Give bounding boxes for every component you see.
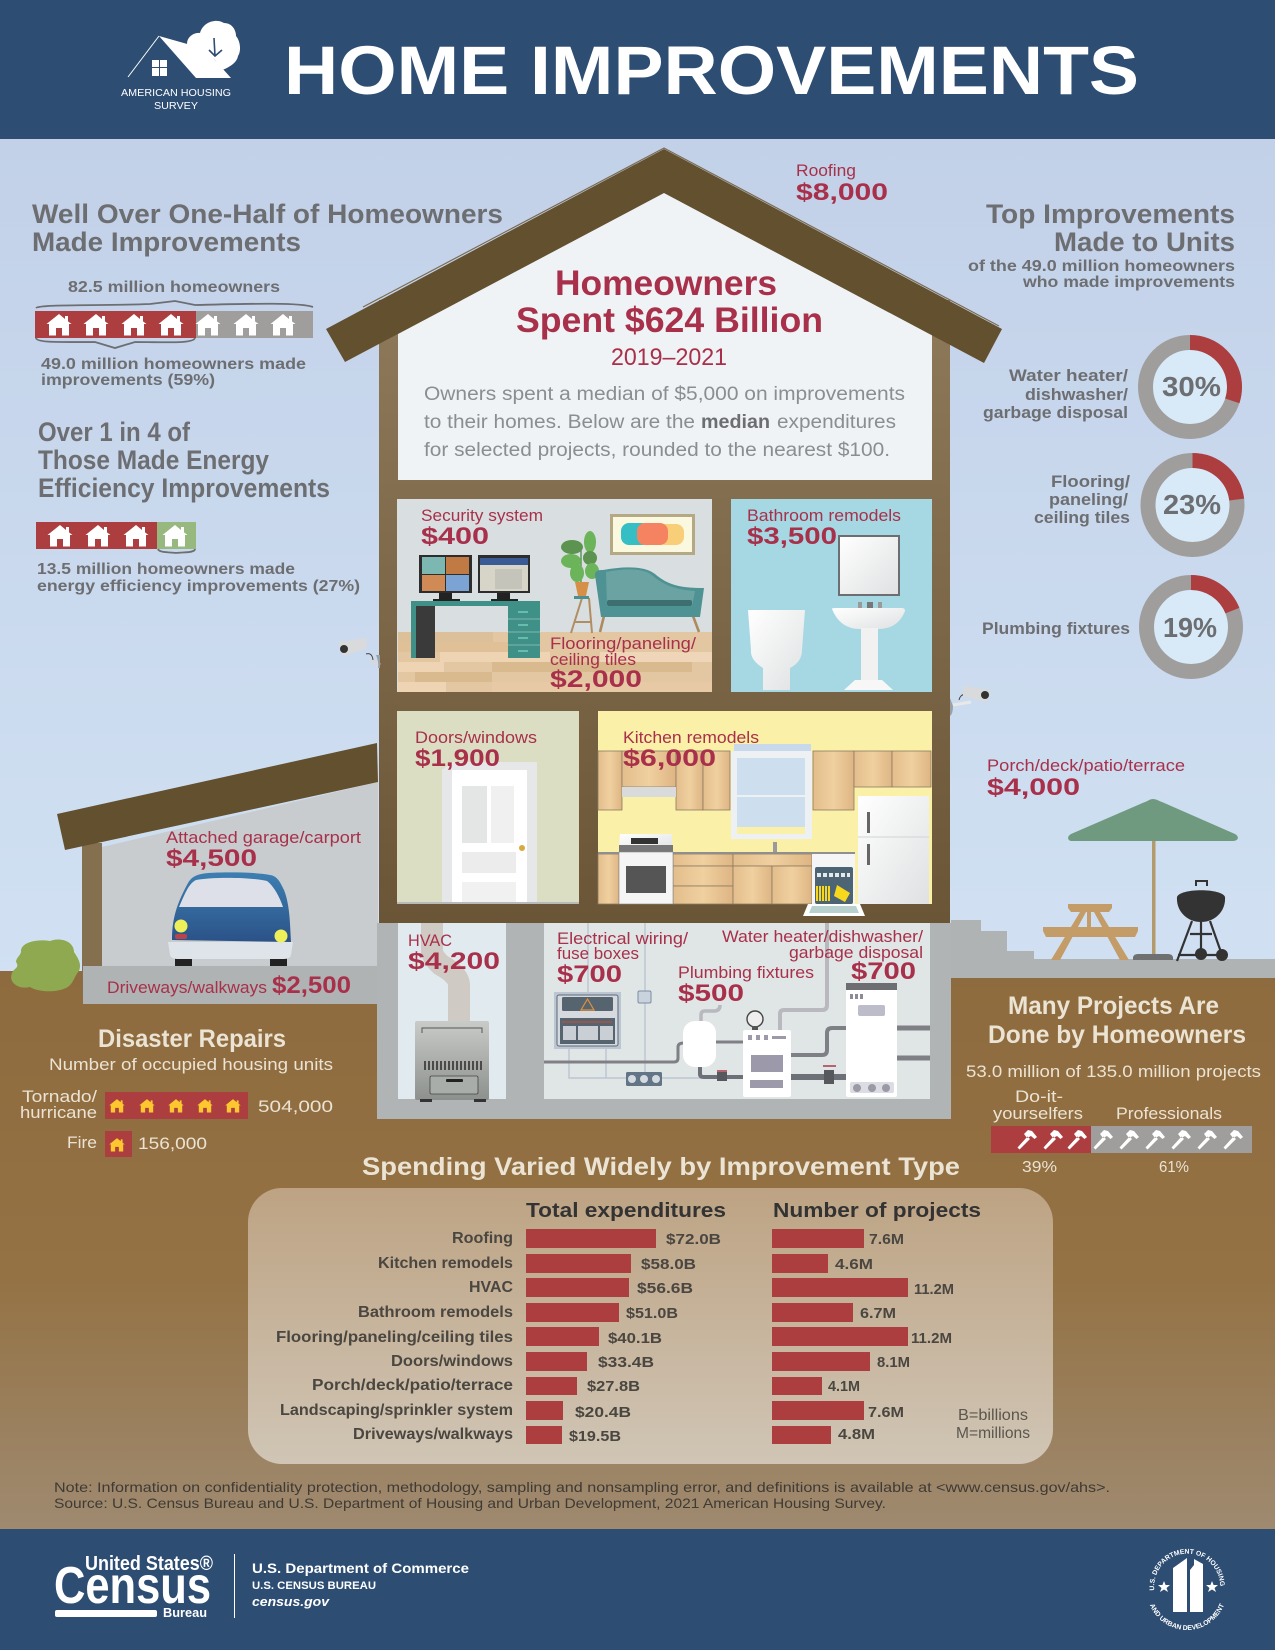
label: flooring: paneling/: [1049, 491, 1128, 509]
picture on wall: [610, 514, 695, 555]
label: HVAC: [408, 931, 500, 975]
label: doors/windows: $1,900: [415, 745, 500, 772]
label: water heater: Water heater/dishwasher/: [722, 927, 923, 946]
icon: car: [168, 872, 293, 966]
label: security system: $400: [421, 523, 489, 550]
attic body text: to their homes. Below are the: [424, 412, 695, 433]
label: flooring: $2,000: [550, 666, 642, 693]
base cabinets: [598, 854, 812, 904]
icon: furnace: [415, 923, 489, 1102]
panel: disaster repairs: [20, 1025, 333, 1157]
bar chart: total expenditures: $20.4B: [575, 1404, 631, 1421]
label: electrical wiring: $700: [557, 961, 622, 988]
label: 13.5 million homeowners: 13.5 million homeowners made: [37, 561, 295, 578]
source note: Note: Information on confidentiality protection, methodology, sampling and nonsampling error, and definitions is available at <www.census.gov/ahs>.: [54, 1479, 1110, 1495]
icon bar: 82.5 million homeowners: [35, 301, 313, 348]
label: kitchen remodels: [623, 728, 759, 772]
label: water heater: Water heater/: [1009, 367, 1128, 385]
bar chart: number of projects: [772, 1229, 954, 1444]
label: bathroom remodels: Bathroom remodels: [747, 506, 901, 525]
labels: do-it-yourselfers and professionals: Do-it-: [1015, 1087, 1063, 1106]
attic headline: 2019–2021: [611, 344, 727, 371]
category labels: [276, 1230, 513, 1443]
basement walls: [377, 923, 951, 1119]
icon: mirror: [839, 536, 899, 595]
bar chart: number of projects: 11.2M: [914, 1281, 954, 1298]
category labels: Porch/deck/patio/terrace: [312, 1377, 513, 1394]
label: 49.0 million homeowners made improvements: 49.0 million homeowners made: [41, 356, 306, 373]
bar chart: total expenditures: $27.8B: [587, 1378, 640, 1395]
label: 49.0 million homeowners made improvements: improvements (59%): [41, 372, 215, 389]
column headings: Number of projects: [773, 1200, 981, 1222]
heading: disaster repairs: Disaster Repairs: [98, 1025, 286, 1053]
label: porch: Porch/deck/patio/terrace: [987, 756, 1185, 775]
American Housing Survey logo: [121, 21, 240, 112]
icon: toilet: [748, 610, 805, 690]
label: attached garage: $4,500: [166, 845, 257, 872]
labels: do-it-yourselfers and professionals: yourselfers: [993, 1104, 1083, 1123]
main house: [326, 148, 1002, 1119]
row: tornado/hurricane: hurricane: [20, 1103, 97, 1122]
attic body text: for selected projects, rounded to the nearest $100.: [424, 440, 890, 461]
label: driveways: [107, 972, 351, 999]
label: doors/windows: [415, 728, 537, 772]
category labels: HVAC: [469, 1279, 513, 1296]
bar chart: number of projects: 8.1M: [877, 1354, 910, 1371]
icon: sink: [832, 602, 905, 690]
label: plumbing fixtures: Plumbing fixtures: [982, 620, 1130, 638]
bar chart: number of projects: 11.2M: [911, 1330, 952, 1347]
bar chart: total expenditures: $19.5B: [569, 1428, 621, 1445]
ground background: [0, 971, 1275, 1529]
row: tornado/hurricane: 504,000: [258, 1097, 333, 1116]
label: water heater: $700: [851, 958, 916, 985]
label: security system: [421, 506, 543, 550]
Census Bureau logo: Census: [54, 1557, 211, 1615]
label: doors/windows: Doors/windows: [415, 728, 537, 747]
label: bathroom remodels: [747, 506, 901, 550]
category labels: Driveways/walkways: [353, 1426, 513, 1443]
icon: expansion tank: [683, 1021, 716, 1067]
donut: 19 percent: [1146, 582, 1236, 672]
bar chart: number of projects: 7.6M: [868, 1404, 904, 1421]
label: electrical wiring: [557, 929, 688, 988]
icon: fuse box: [554, 992, 621, 1049]
heading: top improvements: of the 49.0 million homeowners: [968, 258, 1235, 275]
attic body text: Owners spent a median of $5,000 on improvements: [424, 384, 905, 405]
label: water heater: dishwasher/: [1025, 386, 1128, 404]
label: flooring: Flooring/paneling/: [550, 634, 696, 653]
header band: [0, 0, 1275, 139]
bar chart: total expenditures: $72.0B: [666, 1231, 721, 1248]
label: roofing: Roofing: [796, 161, 856, 180]
icon: picnic table: [1043, 904, 1138, 960]
label: porch: $4,000: [987, 774, 1080, 801]
label: roofing: [796, 161, 888, 206]
sky background: [0, 139, 1275, 981]
label: HVAC: $4,200: [408, 948, 500, 975]
heading: top improvements: Made to Units: [1054, 227, 1235, 257]
source note: [54, 1479, 1110, 1511]
Census Bureau logo: United States®: [85, 1553, 213, 1575]
label: 13.5 million homeowners: [37, 561, 360, 595]
column headings: [526, 1200, 981, 1222]
panel: top improvements: [968, 199, 1237, 672]
range hood: [622, 787, 676, 797]
bar chart: total expenditures: $56.6B: [637, 1280, 693, 1297]
icon: grill: [1177, 881, 1228, 961]
icon: computer desk: [411, 555, 540, 658]
icon: fridge: [858, 796, 929, 904]
heading: top improvements: who made improvements: [1022, 274, 1235, 291]
source note: Source: U.S. Census Bureau and U.S. Department of Housing and Urban Development, 2021 American Housing Survey.: [54, 1495, 886, 1511]
label: water heater: garbage disposal: [983, 404, 1128, 422]
labels: do-it-yourselfers and professionals: [993, 1087, 1222, 1123]
attic headline: Spent $624 Billion: [516, 301, 823, 340]
bar chart: total expenditures: $51.0B: [626, 1305, 678, 1322]
subheading: occupied housing units: Number of occupied housing units: [49, 1055, 333, 1074]
labels: percentages: 39%: [1022, 1159, 1057, 1176]
label: plumbing fixtures: [678, 963, 814, 1007]
bar chart: total expenditures: $58.0B: [641, 1256, 696, 1273]
label: electrical wiring: Electrical wiring/: [557, 929, 688, 948]
label: driveways: $2,500: [272, 972, 351, 999]
bar chart: total expenditures: $40.1B: [608, 1330, 662, 1347]
heading: well over one-half: Made Improvements: [32, 227, 301, 257]
label: flooring: ceiling tiles: [1034, 509, 1130, 527]
American Housing Survey logo: SURVEY: [154, 100, 198, 112]
category labels: Flooring/paneling/ceiling tiles: [276, 1329, 513, 1346]
bar chart: number of projects: 7.6M: [869, 1231, 904, 1248]
label: roofing: $8,000: [796, 179, 888, 206]
icon: kitchen window: [731, 744, 812, 839]
label: security system: Security system: [421, 506, 543, 525]
label: bathroom remodels: $3,500: [747, 523, 837, 550]
heading: top improvements: Top Improvements: [986, 199, 1235, 229]
label: plumbing fixtures: $500: [678, 980, 744, 1007]
label: attached garage: [166, 828, 361, 872]
category labels: Bathroom remodels: [358, 1304, 513, 1321]
panel: energy efficiency improvements: [36, 417, 360, 595]
HUD seal: [1149, 1548, 1225, 1630]
icon bar: energy improvements: [36, 522, 196, 553]
label: 49.0 million homeowners made improvements: [41, 356, 306, 389]
label: porch: [987, 756, 1185, 801]
agency text: census.gov: [252, 1594, 330, 1609]
icon: right security camera: [950, 686, 990, 716]
bar chart: total expenditures: $33.4B: [598, 1354, 654, 1371]
panel: projects done by homeowners: [966, 992, 1261, 1176]
icon: valves: [717, 1066, 836, 1084]
house walls: [379, 300, 950, 923]
heading: spending varied: Spending Varied Widely by Improvement Type: [362, 1153, 960, 1181]
heading: over 1 in 4: Those Made Energy: [38, 445, 269, 475]
bar chart: number of projects: 6.7M: [860, 1305, 896, 1322]
icon: left security camera: [339, 638, 380, 668]
bar chart: number of projects: 4.6M: [835, 1256, 873, 1273]
wood floor: [398, 632, 712, 692]
room: utilities: [544, 923, 930, 1099]
attic headline: [516, 264, 823, 371]
heading: top improvements: [968, 199, 1235, 291]
icon: sofa: [595, 567, 704, 632]
donut: 30 percent: [1146, 342, 1234, 432]
row: fire: Fire: [67, 1133, 97, 1152]
bar chart: total expenditures: [526, 1229, 721, 1445]
heading: well over one-half: Well Over One-Half of Homeowners: [32, 199, 503, 229]
bar chart: number of projects: 4.1M: [828, 1378, 860, 1395]
row: tornado/hurricane: Tornado/: [22, 1087, 97, 1106]
label: water heater: [983, 367, 1128, 422]
heading: many projects: [988, 992, 1246, 1049]
garage: [11, 743, 378, 1004]
label: HVAC: HVAC: [408, 931, 452, 950]
label: flooring: ceiling tiles: [550, 650, 636, 669]
column headings: Total expenditures: [526, 1200, 726, 1222]
labels: percentages: [1022, 1159, 1189, 1176]
label: kitchen remodels: Kitchen remodels: [623, 728, 759, 747]
attic headline: Homeowners: [555, 264, 777, 303]
room: security and flooring: [397, 499, 712, 693]
heading: many projects: Done by Homeowners: [988, 1021, 1246, 1049]
patio with steps, umbrella, picnic table and grill: [951, 799, 1275, 978]
row: fire: 156,000: [138, 1134, 207, 1153]
legend: units: B=billions: [958, 1407, 1028, 1424]
heading: over 1 in 4: Efficiency Improvements: [38, 473, 330, 503]
heading: many projects: Many Projects Are: [1008, 992, 1219, 1020]
icon: stove: [619, 834, 673, 904]
category labels: Roofing: [452, 1230, 513, 1247]
label: attached garage: Attached garage/carport: [166, 828, 361, 847]
icon bar: hammers: [991, 1126, 1252, 1153]
HUD seal: AND URBAN DEVELOPMENT: [1150, 1603, 1224, 1630]
donut: 23 percent: [1148, 460, 1237, 550]
icon: dishwasher: [803, 854, 865, 916]
pipes: [544, 923, 930, 1077]
icon: faucet: [773, 842, 777, 852]
attic body text: median: [701, 412, 770, 433]
label: flooring: [550, 634, 696, 693]
category labels: Doors/windows: [391, 1353, 513, 1370]
room: kitchen: [598, 711, 932, 916]
icon: outlets: [626, 1072, 662, 1086]
donut: 30 percent: 30%: [1162, 371, 1221, 402]
wiring lines: [569, 923, 702, 1078]
donut: 23 percent: 23%: [1163, 489, 1221, 520]
icon: boiler: [743, 1011, 791, 1097]
icon: plant and stool: [561, 531, 599, 633]
category labels: Kitchen remodels: [378, 1255, 513, 1272]
label: 82.5 million homeowners: 82.5 million homeowners: [68, 279, 280, 296]
label: flooring: [1034, 473, 1130, 527]
label: electrical wiring: fuse boxes: [557, 944, 639, 963]
HUD seal: U.S. DEPARTMENT OF HOUSING: [1149, 1548, 1225, 1590]
Census Bureau logo: Bureau: [163, 1605, 207, 1620]
icon: bush: [11, 939, 80, 991]
heading: well over one-half: [32, 199, 503, 257]
legend: units: [956, 1407, 1030, 1442]
row: tornado/hurricane: [20, 1087, 333, 1122]
donut: 19 percent: 19%: [1163, 612, 1217, 643]
icon: light switch: [638, 991, 651, 1003]
agency text: U.S. CENSUS BUREAU: [252, 1580, 376, 1592]
driveway slab: [83, 966, 377, 1004]
agency text: [252, 1560, 469, 1609]
label: kitchen remodels: $6,000: [623, 745, 716, 772]
label: water heater: [722, 927, 923, 985]
title: HOME IMPROVEMENTS: [284, 32, 1139, 109]
labels: percentages: 61%: [1159, 1159, 1189, 1176]
heading: over 1 in 4: [38, 417, 330, 503]
heading: over 1 in 4: Over 1 in 4 of: [38, 417, 190, 447]
icon: water heater: [846, 983, 897, 1097]
room: HVAC: [398, 923, 506, 1102]
icon: door: [442, 762, 537, 902]
label: flooring: Flooring/: [1051, 473, 1130, 491]
room: bathroom: [731, 499, 932, 692]
attic body text: [424, 384, 905, 461]
row: fire: [67, 1131, 207, 1157]
panel: spending table: [248, 1188, 1053, 1464]
room: doors and windows: [397, 711, 579, 904]
label: plumbing fixtures: Plumbing fixtures: [678, 963, 814, 982]
panel: homeowners who made improvements: [32, 199, 503, 389]
attic body text: expenditures: [777, 412, 896, 433]
label: water heater: garbage disposal: [789, 943, 923, 962]
attic panel: [398, 193, 932, 480]
labels: do-it-yourselfers and professionals: Professionals: [1116, 1104, 1222, 1123]
icon: umbrella: [1068, 799, 1238, 960]
category labels: Landscaping/sprinkler system: [280, 1402, 513, 1419]
icon: roof: [326, 148, 1002, 363]
agency text: U.S. Department of Commerce: [252, 1560, 469, 1576]
label: 13.5 million homeowners: energy efficiency improvements (27%): [37, 578, 360, 595]
label: driveways: Driveways/walkways: [107, 978, 267, 997]
footer band: [54, 1548, 1225, 1630]
bar chart: number of projects: 4.8M: [838, 1426, 875, 1443]
upper cabinets: [598, 751, 931, 810]
subheading: project count: 53.0 million of 135.0 million projects: [966, 1062, 1261, 1081]
American Housing Survey logo: AMERICAN HOUSING: [121, 87, 231, 99]
legend: units: M=millions: [956, 1425, 1030, 1442]
